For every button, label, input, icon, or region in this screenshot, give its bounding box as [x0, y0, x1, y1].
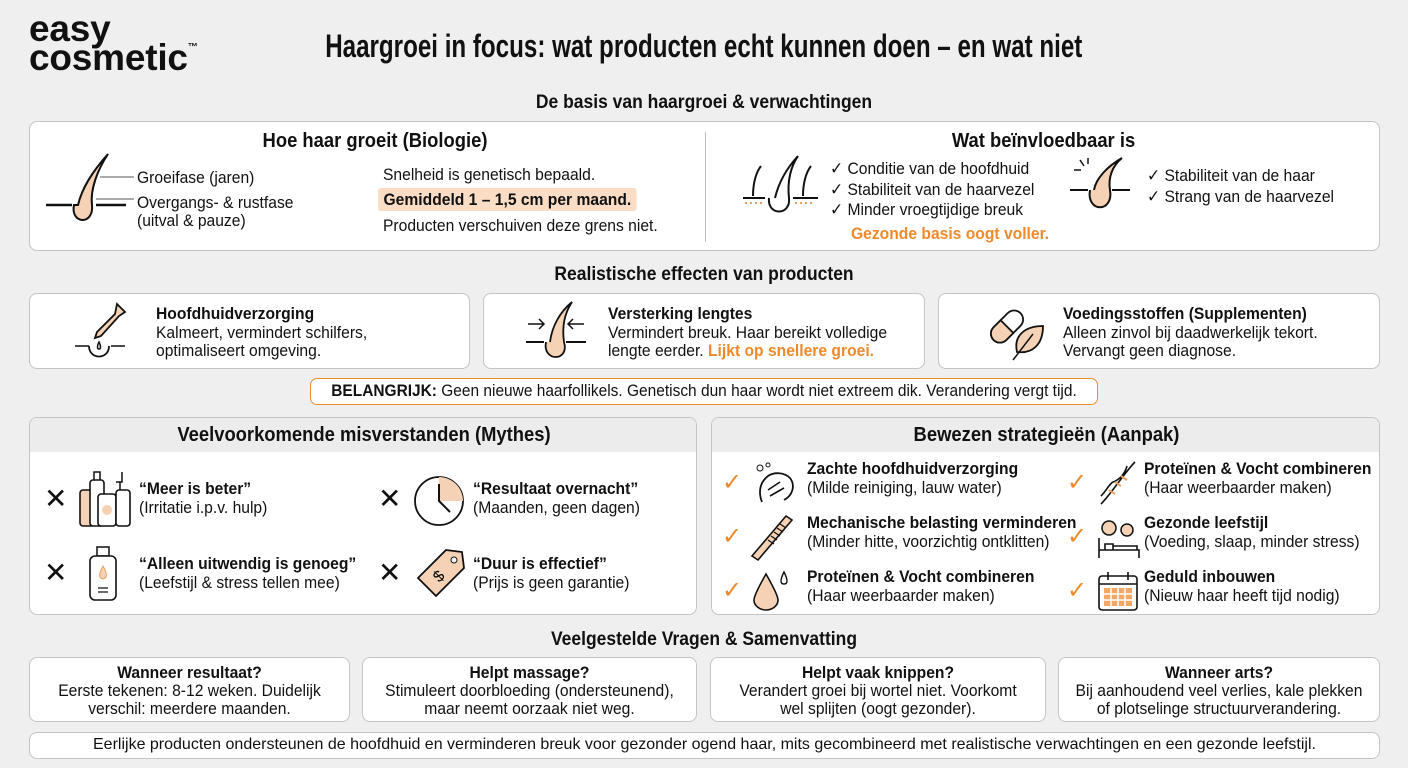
- myth: resultaat overnacht: [378, 476, 640, 526]
- card: hoofdhuidverzorging: [29, 293, 470, 369]
- faq: knippen: Helpt vaak knippen?: [802, 663, 954, 682]
- myth: duur is effectief: (Prijs is geen garantie): [473, 572, 629, 592]
- callout: belangrijk: BELANGRIJK: Geen nieuwe haarfollikels. Genetisch dun haar wordt niet extreem dik. Verandering vergt tijd.: [331, 381, 1077, 400]
- text: [1063, 304, 1318, 360]
- text: Vervangt geen diagnose.: [1063, 341, 1236, 360]
- myth: meer is beter: [44, 471, 267, 527]
- myth: alleen uitwendig: (Leefstijl & stress tellen mee): [139, 572, 340, 592]
- myth: meer is beter: (Irritatie i.p.v. hulp): [139, 498, 267, 516]
- strategy: geduld: [1067, 567, 1340, 611]
- faq: massage: Helpt massage?: [470, 663, 589, 682]
- faq: massage: maar neemt oorzaak niet weg.: [424, 699, 635, 718]
- strategy: zachte hoofdhuidverzorging: (Milde reiniging, lauw water): [807, 478, 1002, 496]
- faq: knippen: Verandert groei bij wortel niet. Voorkomt: [739, 681, 1017, 700]
- strategy: dna proteinen: (Haar weerbaarder maken): [1144, 478, 1332, 496]
- faq: arts: Wanneer arts?: [1165, 663, 1273, 682]
- panel: mythes: [29, 417, 697, 615]
- text: Hoofdhuidverzorging: [156, 304, 314, 323]
- text: growth speed: Snelheid is genetisch bepaald.: [383, 165, 595, 184]
- strategy: dna proteinen: [1067, 459, 1371, 505]
- logo: [29, 8, 198, 78]
- strategy: gezonde leefstijl: Gezonde leefstijl: [1144, 513, 1268, 532]
- text: [608, 304, 887, 360]
- list: hair: ✓ Strang van de haarvezel: [1147, 187, 1334, 206]
- list: scalp: [830, 159, 1034, 219]
- strategy: geduld: ✓: [1067, 576, 1087, 604]
- myth: duur is effectief: [378, 549, 629, 598]
- panel: basis: Producten verschuiven deze grens niet.: [383, 216, 658, 235]
- strategy: mechanische belasting: (Minder hitte, voorzichtig ontklitten): [807, 532, 1050, 550]
- strategy: gezonde leefstijl: (Voeding, slaap, minder stress): [1144, 532, 1360, 550]
- callout: gezonde basis: Gezonde basis oogt voller.: [851, 224, 1049, 243]
- panel: basis: Overgangs- & rustfase: [137, 193, 293, 212]
- strategy: zachte hoofdhuidverzorging: [722, 459, 1018, 502]
- myth: alleen uitwendig: [44, 546, 356, 601]
- faq: wanneer resultaat: Eerste tekenen: 8-12 weken. Duidelijk: [58, 681, 321, 700]
- strategy: mechanische belasting: [722, 513, 1076, 561]
- logo: cosmetic™: [29, 37, 198, 78]
- faq: wanneer resultaat: Wanneer resultaat?: [117, 663, 262, 682]
- strategy: proteinen vocht: Proteïnen & Vocht combineren: [807, 567, 1034, 586]
- icon: hair follicle: [46, 153, 134, 221]
- faq: knippen: wel splijten (oogt gezonder).: [780, 699, 976, 718]
- strategy: proteinen vocht: ✓: [722, 576, 742, 604]
- strategy: gezonde leefstijl: [1067, 513, 1360, 558]
- card: voedingsstoffen: [938, 293, 1380, 369]
- strategy: gezonde leefstijl: ✓: [1067, 522, 1087, 550]
- list: scalp: ✓ Stabiliteit van de haarvezel: [830, 180, 1034, 198]
- myth: meer is beter: ✕: [44, 483, 67, 514]
- heading: Veelvoorkomende misverstanden (Mythes): [177, 424, 551, 446]
- myth: duur is effectief: ✕: [378, 557, 401, 588]
- callout: belangrijk: [310, 378, 1098, 405]
- myth: meer is beter: “Meer is beter”: [139, 479, 251, 498]
- icon: capsule and leaf: [990, 310, 1044, 360]
- text: Vermindert breuk. Haar bereikt volledige: [608, 322, 887, 342]
- text: [156, 304, 367, 360]
- strategy: dna proteinen: ✓: [1067, 468, 1087, 496]
- panel: basis: [29, 121, 1380, 251]
- myth: duur is effectief: $: [430, 568, 449, 586]
- strategy: mechanische belasting: ✓: [722, 522, 742, 550]
- section heading: basis: De basis van haargroei & verwachtingen: [536, 92, 872, 113]
- panel: basis: Gemiddeld 1 – 1,5 cm per maand.: [384, 190, 631, 209]
- icon: hair arrows: [526, 301, 586, 358]
- faq: wanneer resultaat: verschil: meerdere maanden.: [88, 699, 291, 718]
- list: hair: [1147, 166, 1334, 206]
- icon: strong hair: [1070, 157, 1130, 208]
- list: scalp: ✓ Minder vroegtijdige breuk: [830, 200, 1023, 219]
- myth: duur is effectief: “Duur is effectief”: [473, 554, 607, 573]
- card: versterking: [483, 293, 925, 369]
- labels: phases: Groeifase (jaren): [137, 168, 254, 187]
- text: optimaliseert omgeving.: [156, 341, 321, 360]
- summary bar: Eerlijke producten ondersteunen de hoofdhuid en verminderen breuk voor gezonder ogend haar, mits gecombineerd met realistische verwachtingen en een gezonde leefstijl.: [93, 736, 1316, 753]
- myth: resultaat overnacht: “Resultaat overnacht”: [473, 479, 638, 498]
- myth: resultaat overnacht: ✕: [378, 483, 401, 514]
- strategy: dna proteinen: Proteïnen & Vocht combineren: [1144, 459, 1371, 478]
- text: Voedingsstoffen (Supplementen): [1063, 304, 1307, 323]
- icon: hairs in scalp: [743, 155, 818, 212]
- myth: resultaat overnacht: (Maanden, geen dagen): [473, 498, 640, 516]
- faq: arts: Bij aanhoudend veel verlies, kale plekken: [1076, 681, 1362, 700]
- strategy: zachte hoofdhuidverzorging: Zachte hoofdhuidverzorging: [807, 459, 1018, 478]
- list: scalp: ✓ Conditie van de hoofdhuid: [830, 159, 1029, 178]
- text: lengte eerder. Lijkt op snellere groei.: [608, 341, 874, 360]
- strategy: proteinen vocht: (Haar weerbaarder maken): [807, 586, 995, 604]
- strategy: proteinen vocht: [722, 567, 1034, 611]
- faq: arts: of plotselinge structuurverandering.: [1097, 699, 1341, 718]
- strategy: geduld: Geduld inbouwen: [1144, 567, 1275, 586]
- faq: arts: [1058, 657, 1380, 722]
- list: hair: ✓ Stabiliteit van de haar: [1147, 166, 1315, 185]
- heading: wat beinvloedbaar: Wat beïnvloedbaar is: [952, 130, 1135, 152]
- faq: massage: Stimuleert doorbloeding (ondersteunend),: [385, 681, 674, 700]
- text: Kalmeert, vermindert schilfers,: [156, 322, 367, 342]
- text: Alleen zinvol bij daadwerkelijk tekort.: [1063, 322, 1318, 342]
- myth: alleen uitwendig: ✕: [44, 557, 67, 588]
- strategy: geduld: (Nieuw haar heeft tijd nodig): [1144, 586, 1340, 604]
- strategy: mechanische belasting: Mechanische belasting verminderen: [807, 513, 1076, 532]
- heading: [30, 418, 698, 452]
- title: Haargroei in focus: wat producten echt kunnen doen – en wat niet: [325, 28, 1082, 64]
- panel: basis: (uitval & pauze): [137, 211, 246, 230]
- section heading: faq: Veelgestelde Vragen & Samenvatting: [551, 629, 857, 650]
- faq: wanneer resultaat: [29, 657, 350, 722]
- myth: alleen uitwendig: “Alleen uitwendig is genoeg”: [139, 554, 356, 573]
- text: Versterking lengtes: [608, 304, 752, 323]
- icon: dropper: [75, 302, 126, 358]
- faq: massage: [362, 657, 697, 722]
- section heading: effecten: Realistische effecten van producten: [554, 264, 854, 285]
- heading: [712, 418, 1381, 452]
- faq: knippen: [710, 657, 1046, 722]
- logo: easy: [29, 8, 111, 49]
- heading: Bewezen strategieën (Aanpak): [914, 424, 1179, 446]
- summary bar: [29, 732, 1380, 759]
- heading: hoe haar groeit: Hoe haar groeit (Biologie): [263, 130, 487, 152]
- panel: strategieen: [711, 417, 1380, 615]
- strategy: zachte hoofdhuidverzorging: ✓: [722, 468, 742, 496]
